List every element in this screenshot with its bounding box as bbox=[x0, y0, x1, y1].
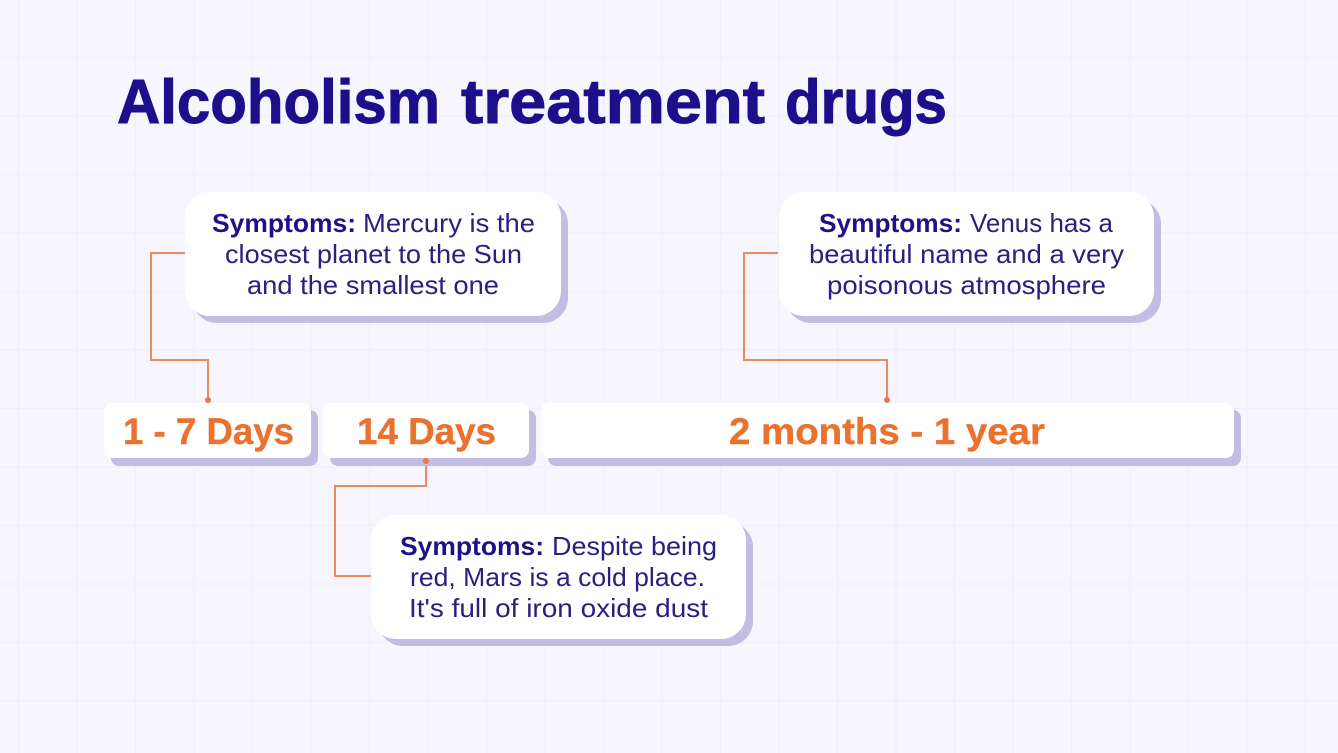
timeline badge: 2 months - 1 year: 2 months - 1 year bbox=[729, 411, 1045, 452]
title bbox=[117, 68, 947, 137]
callout: Mars symptoms: Symptoms: bbox=[400, 531, 544, 561]
connector dot: 14 Days bbox=[423, 458, 429, 464]
callout: Mars symptoms: red, Mars is a cold place. bbox=[410, 562, 705, 592]
callout: Venus symptoms: Venus has a bbox=[970, 208, 1114, 238]
title: Alcoholism bbox=[117, 68, 440, 137]
callout: Mars symptoms: Despite being bbox=[552, 531, 717, 561]
callout: Mars symptoms: It's full of iron oxide dust bbox=[409, 593, 709, 623]
connector: callout 2 to 14 Days bbox=[335, 461, 426, 576]
callout: Venus symptoms bbox=[779, 192, 1161, 323]
callout: Mercury symptoms: Mercury is the bbox=[363, 208, 535, 238]
title: drugs bbox=[785, 68, 947, 137]
timeline badge: 14 Days bbox=[323, 403, 536, 466]
title: treatment bbox=[461, 68, 765, 137]
callout: Mercury symptoms bbox=[185, 192, 568, 323]
connector: callout 3 to 2 months - 1 year bbox=[744, 253, 890, 403]
callout: Mercury symptoms: Symptoms: bbox=[212, 208, 356, 238]
timeline badge: 1 - 7 Days: 1 - 7 Days bbox=[123, 411, 294, 452]
callout: Venus symptoms: poisonous atmosphere bbox=[827, 270, 1106, 300]
callout: Mercury symptoms: and the smallest one bbox=[247, 270, 499, 300]
callout: Mercury symptoms: closest planet to the Sun bbox=[225, 239, 522, 269]
timeline badge: 1 - 7 Days bbox=[104, 403, 318, 466]
timeline badge: 14 Days: 14 Days bbox=[357, 411, 496, 452]
connector: callout 1 to 1 - 7 Days bbox=[151, 253, 211, 403]
callout: Venus symptoms: beautiful name and a very bbox=[809, 239, 1124, 269]
timeline badge: 2 months - 1 year bbox=[541, 403, 1241, 466]
callout: Venus symptoms: Symptoms: bbox=[819, 208, 962, 238]
callout: Mars symptoms bbox=[371, 515, 753, 646]
